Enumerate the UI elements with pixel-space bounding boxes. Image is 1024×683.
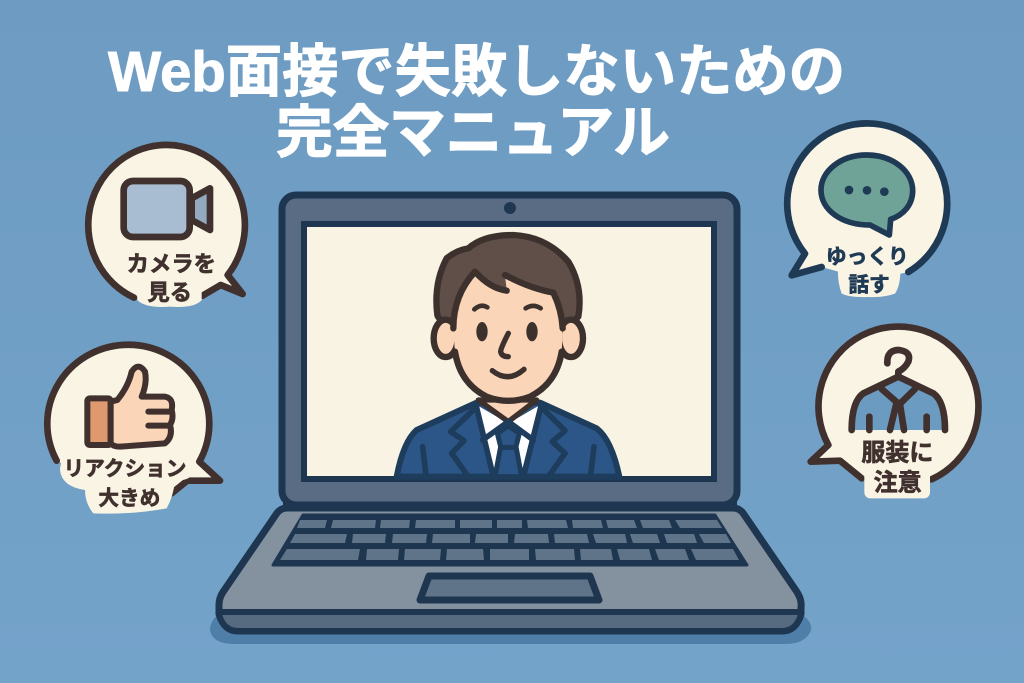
person on screen: [397, 235, 619, 477]
laptop shadow: [210, 610, 811, 644]
laptop lid: [282, 195, 737, 505]
title: [108, 40, 845, 165]
bubble shape: [88, 145, 245, 307]
bubble shape: [811, 327, 978, 498]
title: Web面接で失敗しないための: [108, 40, 845, 104]
label: カメラを: [127, 252, 216, 277]
icon: video camera: [124, 181, 210, 237]
label: [826, 245, 909, 297]
keyboard: [273, 515, 747, 565]
ears: [434, 320, 458, 357]
eyebrows: [474, 306, 541, 309]
label: リアクション: [64, 458, 186, 481]
bubble: reaction: [47, 345, 220, 514]
label: 大きめ: [98, 487, 160, 510]
title: 完全マニュアル: [276, 101, 670, 165]
face: [453, 272, 563, 401]
bubble: clothing: [811, 327, 978, 498]
label: [861, 439, 933, 496]
collar and lapels: [423, 405, 594, 477]
label: 話す: [848, 274, 890, 297]
bubble: camera: [88, 145, 245, 307]
face outline: [453, 272, 563, 401]
bubble: speak slowly: [787, 123, 947, 297]
hair: [436, 235, 580, 327]
tie: [495, 426, 522, 477]
jacket: [397, 403, 619, 477]
shirt: [477, 405, 540, 477]
laptop: [210, 195, 811, 644]
icon: speech balloon: [821, 155, 913, 235]
bubble shape: [787, 123, 947, 297]
eyes: [476, 322, 538, 341]
laptop base: [219, 505, 801, 631]
label: 見る: [147, 280, 192, 305]
touchpad: [420, 576, 599, 600]
icon: thumbs up: [87, 367, 173, 447]
label: 注意: [874, 469, 922, 496]
icon: hanger with shirt: [852, 350, 945, 430]
label: ゆっくり: [826, 245, 909, 268]
label: [127, 252, 216, 305]
bubble shape: [47, 345, 220, 514]
nose and mouth: [492, 333, 524, 377]
label: 服装に: [861, 439, 933, 466]
label: [64, 458, 186, 510]
neck: [478, 400, 537, 422]
